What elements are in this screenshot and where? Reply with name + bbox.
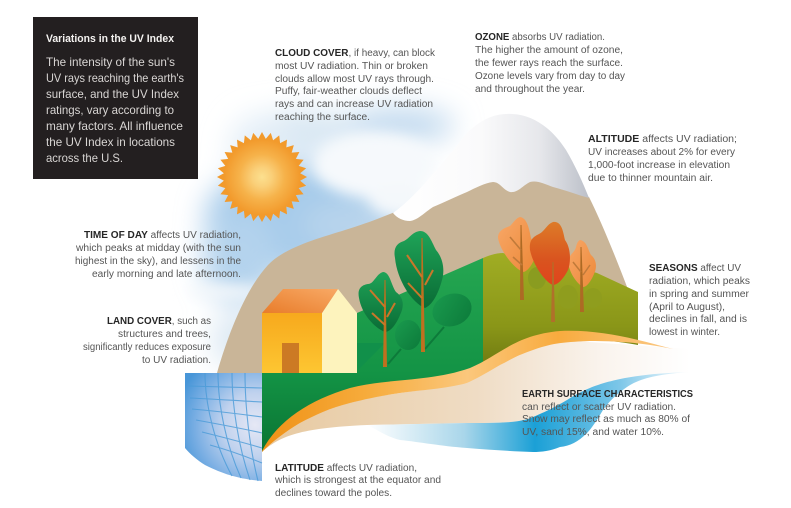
text: ozone: Ozone levels vary from day to day [475, 71, 625, 82]
autumn tree right [568, 240, 596, 312]
text: land cover: to UV radiation. [142, 355, 211, 366]
text: altitude: ALTITUDE affects UV radiation; [588, 134, 737, 145]
shrubs [357, 288, 476, 370]
text: latitude: which is strongest at the equator and [274, 475, 441, 486]
text: ozone: and throughout the year. [475, 84, 585, 95]
text: seasons [649, 263, 750, 338]
box body text: surface, and the UV Index [46, 87, 179, 101]
text: ozone: OZONE absorbs UV radiation. [475, 32, 605, 43]
text: seasons: declines in fall, and is [649, 314, 747, 325]
text: seasons: (April to August), [649, 302, 725, 313]
text: earth surface characteristics: Snow may reflect as much as 80% of [522, 414, 690, 425]
text: latitude: declines toward the poles. [275, 488, 392, 499]
box body text: The intensity of the sun's [46, 55, 175, 69]
text: cloud cover: most UV radiation. Thin or broken [275, 61, 428, 72]
text: ozone: The higher the amount of ozone, [475, 45, 623, 56]
house gable wall [322, 289, 357, 373]
text: land cover: significantly reduces exposure [83, 342, 211, 353]
text: time of day [75, 230, 241, 280]
text: cloud cover: clouds allow most UV rays through. [275, 74, 434, 85]
sky with clouds [187, 107, 455, 368]
box heading: Variations in the UV Index [46, 33, 175, 45]
text: earth surface characteristics: EARTH SURFACE CHARACTERISTICS [522, 389, 693, 400]
green trees [357, 231, 476, 370]
house door [282, 343, 299, 373]
box body text: the UV Index in locations [46, 135, 175, 149]
autumn trees [498, 217, 602, 322]
sun [217, 132, 307, 222]
mountain body [217, 165, 632, 373]
sand area [262, 340, 690, 452]
text: cloud cover: reaching the surface. [275, 112, 370, 123]
text: time of day: TIME OF DAY affects UV radiation, [84, 230, 241, 241]
globe [185, 373, 262, 481]
text: latitude: LATITUDE affects UV radiation, [275, 463, 417, 474]
mountain [217, 114, 632, 373]
text: altitude [588, 134, 737, 184]
text: time of day: which peaks at midday (with the sun [75, 243, 241, 254]
text: cloud cover: rays and can increase UV radiation [275, 99, 433, 110]
olive hill [483, 253, 638, 375]
text: land cover: LAND COVER, such as [107, 316, 211, 327]
text: latitude [274, 463, 441, 499]
box body text: many factors. All influence [46, 119, 183, 133]
text: cloud cover: Puffy, fair-weather clouds deflect [275, 86, 422, 97]
box body text: across the U.S. [46, 151, 123, 165]
house roof [262, 289, 338, 313]
text: time of day: highest in the sky), and lessens in the [75, 256, 241, 267]
text: land cover [83, 316, 211, 366]
text: earth surface characteristics [522, 389, 693, 438]
text: time of day: early morning and late afternoon. [92, 269, 241, 280]
autumn tree left [498, 217, 535, 300]
text: ozone: the fewer rays reach the surface. [475, 58, 623, 69]
globe grid lines [188, 373, 262, 481]
house front wall [262, 313, 322, 373]
tree left [359, 272, 403, 367]
green hill [262, 258, 483, 452]
text: ozone [475, 32, 625, 95]
autumn tree centre [530, 222, 570, 322]
text: altitude: due to thinner mountain air. [588, 173, 713, 184]
water [367, 372, 690, 452]
text: seasons: SEASONS affect UV [649, 263, 741, 274]
text: seasons: radiation, which peaks [649, 276, 750, 287]
text: altitude: 1,000-foot increase in elevation [588, 160, 730, 171]
orange sand band [262, 331, 673, 452]
text: cloud cover [275, 48, 436, 123]
house [262, 289, 357, 373]
text: earth surface characteristics: UV, sand 15%, and water 10%. [522, 427, 664, 438]
box body text: UV rays reaching the earth's [46, 71, 184, 85]
text: altitude: UV increases about 2% for every [588, 147, 735, 158]
box body text [46, 55, 184, 165]
box body text: ratings, vary according to [46, 103, 174, 117]
snow cap [393, 114, 589, 221]
text: seasons: in spring and summer [649, 289, 750, 300]
text: cloud cover: CLOUD COVER, if heavy, can block [275, 48, 436, 59]
text: earth surface characteristics: can reflect or scatter UV radiation. [522, 402, 676, 413]
tree right [394, 231, 443, 352]
black intro box [33, 17, 198, 179]
text: seasons: lowest in winter. [649, 327, 720, 338]
text: land cover: structures and trees, [118, 329, 211, 340]
